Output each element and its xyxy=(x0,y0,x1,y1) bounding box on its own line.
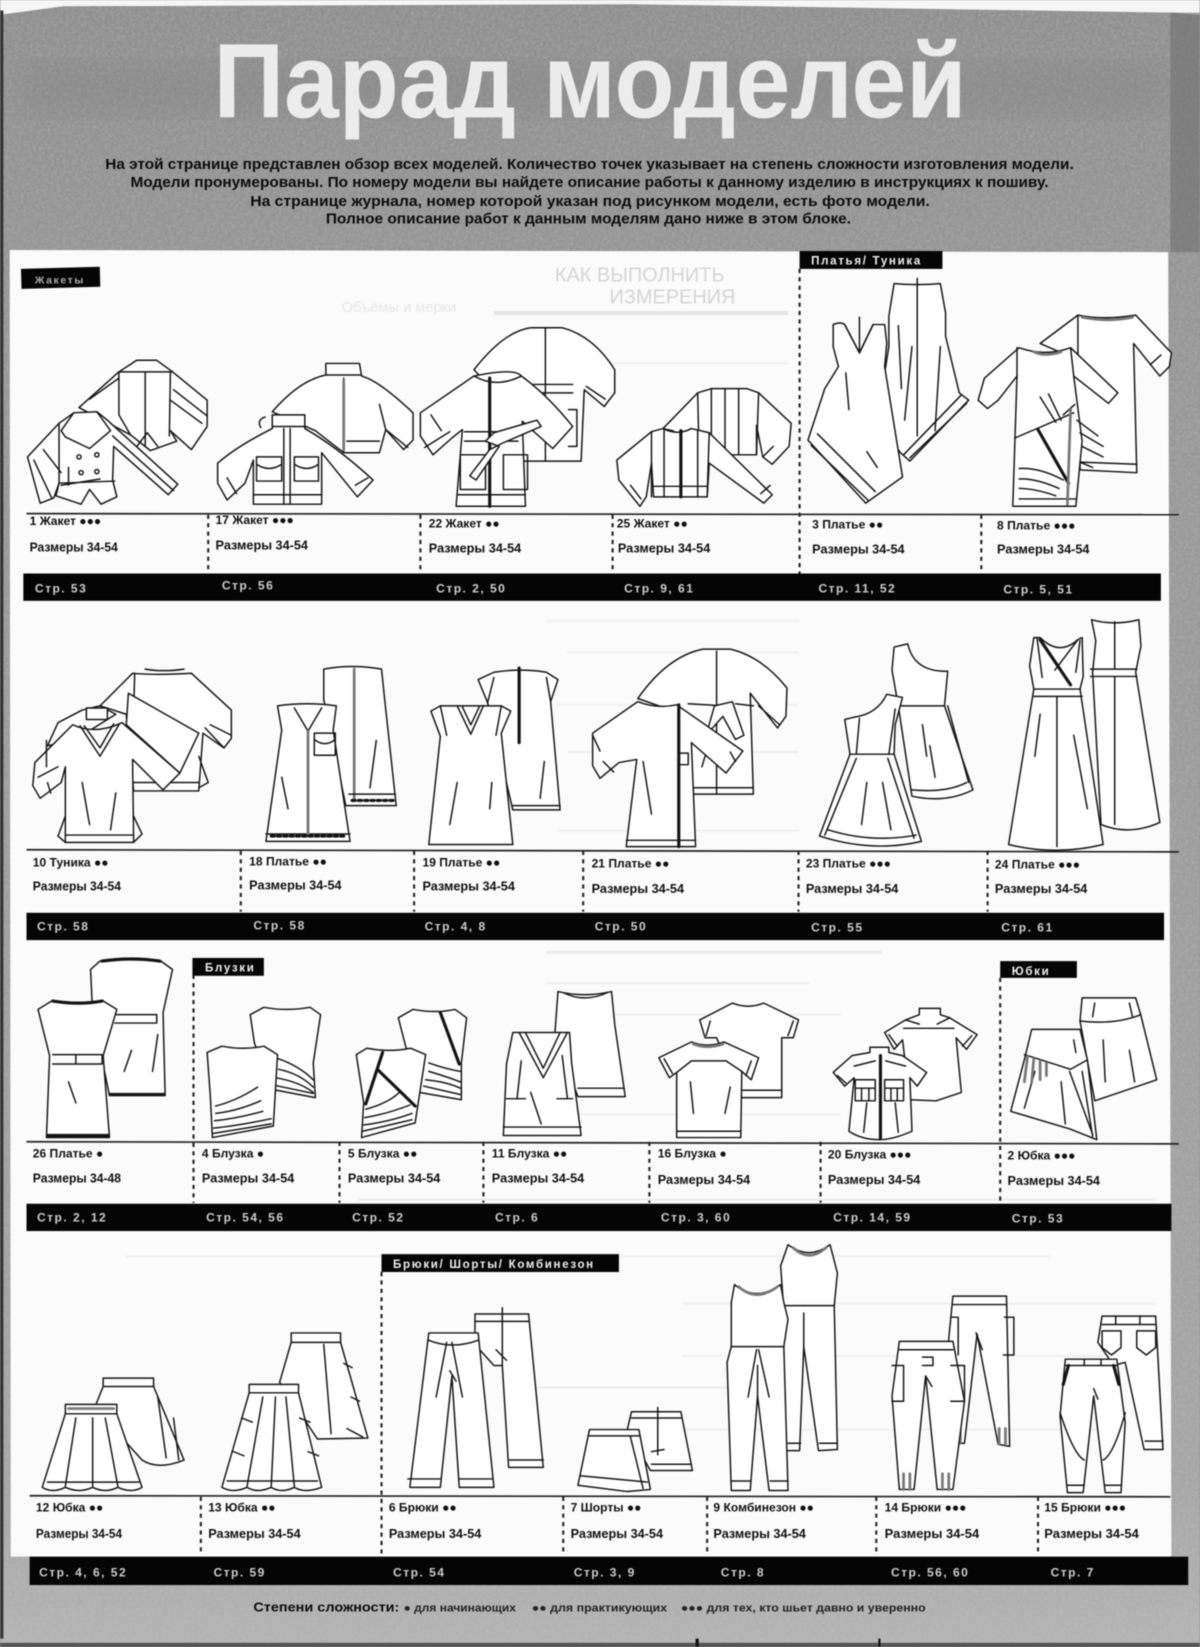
label: 24: 24 Платье ●●● xyxy=(995,858,1080,872)
drawing: blouse 16 xyxy=(659,1003,799,1138)
drawing: dress 24 xyxy=(1009,620,1160,850)
model 1 jacket: Стр. 53 xyxy=(35,581,87,595)
model 23 dress: Стр. 55 xyxy=(811,921,864,935)
model 24 dress xyxy=(995,620,1160,935)
label: 2: 2 Юбка ●●● xyxy=(1008,1149,1075,1163)
model 23 dress: Размеры 34-54 xyxy=(806,882,898,896)
intro text block: На этой странице представлен обзор всех моделей. Количество точек указывает на степень сложности изготовления модели. xyxy=(105,157,1074,173)
model 2 skirt: Размеры 34-54 xyxy=(1008,1174,1100,1188)
label: 4: 4 Блузка ● xyxy=(202,1147,264,1161)
label: 11: 11 Блузка ●● xyxy=(492,1147,567,1161)
row 3 rules and page bar xyxy=(26,975,1179,1231)
label: 15: 15 Брюки ●●● xyxy=(1044,1501,1126,1515)
legend: difficulty levels: ●●● для тех, кто шьет давно и уверенно xyxy=(681,1602,926,1614)
model 18 dress: Стр. 58 xyxy=(253,919,306,933)
model 9 jumpsuit: Размеры 34-54 xyxy=(713,1527,806,1541)
model 12 skirt: Стр. 4, 6, 52 xyxy=(39,1566,127,1580)
label: 8: 8 Платье ●●● xyxy=(997,518,1075,532)
label: 23: 23 Платье ●●● xyxy=(806,857,891,871)
model 20 blouse xyxy=(828,1008,977,1225)
model 13 skirt xyxy=(208,1333,368,1580)
category tag: Платья/Туника: Платья/ Туника xyxy=(811,256,922,268)
label: 26: 26 Платье ● xyxy=(33,1147,103,1161)
show-through text from reverse page: Объёмы и мерки xyxy=(342,300,456,316)
model 24 dress: Размеры 34-54 xyxy=(995,882,1087,896)
drawing: dress 18 xyxy=(266,666,396,841)
drawing: blouse 5 xyxy=(356,1009,467,1138)
model 7 shorts xyxy=(571,1408,692,1580)
model 9 jumpsuit: Стр. 8 xyxy=(721,1566,765,1580)
legend: difficulty levels xyxy=(253,1599,926,1614)
model 12 skirt: Размеры 34-54 xyxy=(36,1527,122,1541)
legend: difficulty levels: ● для начинающих xyxy=(404,1602,517,1614)
model 19 dress xyxy=(422,668,560,934)
drawing: trousers 14 xyxy=(892,1296,1014,1489)
model 6 trousers: Размеры 34-54 xyxy=(389,1527,481,1541)
model 4 blouse xyxy=(202,1007,321,1225)
drawing: dress 21 xyxy=(593,649,787,847)
model 25 jacket: Стр. 9, 61 xyxy=(624,581,694,595)
label: 25: 25 Жакет ●● xyxy=(617,516,688,530)
model 5 blouse: Стр. 52 xyxy=(352,1211,405,1225)
drawing: jacket 17 xyxy=(218,363,413,504)
model 19 dress: Стр. 4, 8 xyxy=(425,920,487,934)
category tag: Брюки/Шорты/Комбинезон: Брюки/ Шорты/ Комбинезон xyxy=(393,1259,595,1271)
drawing: blouse 20 xyxy=(833,1008,977,1140)
label: 6: 6 Брюки ●● xyxy=(389,1501,457,1515)
drawing: trousers 15 xyxy=(1060,1316,1163,1493)
model 3 dress: Размеры 34-54 xyxy=(812,543,905,557)
model 6 trousers: Стр. 54 xyxy=(393,1566,445,1580)
label: 12: 12 Юбка ●● xyxy=(36,1501,103,1515)
model 11 blouse: Размеры 34-54 xyxy=(492,1172,584,1186)
model 23 dress xyxy=(806,644,973,935)
model 16 blouse xyxy=(658,1003,799,1225)
model 21 dress: Стр. 50 xyxy=(595,920,647,934)
model 8 dress xyxy=(978,315,1171,596)
model 18 dress: Размеры 34-54 xyxy=(249,879,342,893)
model 14 trousers: Стр. 56, 60 xyxy=(891,1566,969,1580)
model 3 dress xyxy=(808,278,969,595)
white catalogue panel xyxy=(10,250,1171,1557)
model 3 dress: Стр. 11, 52 xyxy=(818,581,896,595)
drawing: skirt 2 xyxy=(1011,998,1157,1140)
drawing: jacket 25 xyxy=(617,389,791,506)
model 19 dress: Размеры 34-54 xyxy=(422,880,515,894)
category tag: Блузки: Блузки xyxy=(205,963,256,975)
model 14 trousers xyxy=(885,1296,1014,1580)
model 2 skirt xyxy=(1008,998,1157,1226)
model 22 jacket xyxy=(420,328,615,595)
model 15 trousers: Размеры 34-54 xyxy=(1044,1527,1139,1541)
show-through text from reverse page: ИЗМЕРЕНИЯ xyxy=(609,287,735,309)
model 10 tunic: Стр. 58 xyxy=(37,920,89,934)
drawing: dress 23 xyxy=(820,644,973,846)
model 11 blouse xyxy=(492,992,625,1225)
model 5 blouse: Размеры 34-54 xyxy=(348,1172,440,1186)
label: 17: 17 Жакет ●●● xyxy=(216,513,294,527)
label: 7: 7 Шорты ●● xyxy=(571,1501,641,1515)
label: 14: 14 Брюки ●●● xyxy=(885,1501,966,1515)
model 9 jumpsuit xyxy=(713,1245,837,1580)
model 25 jacket: Размеры 34-54 xyxy=(618,542,710,556)
model 26 dress xyxy=(33,958,172,1225)
drawing: shorts 7 xyxy=(578,1408,692,1492)
label: 10: 10 Туника ●● xyxy=(33,856,109,870)
model 21 dress: Размеры 34-54 xyxy=(592,882,684,896)
model 7 shorts: Стр. 3, 9 xyxy=(574,1566,636,1580)
row 2 rules and page bar xyxy=(26,850,1179,940)
model 20 blouse: Размеры 34-54 xyxy=(828,1173,920,1187)
model 21 dress xyxy=(592,649,787,934)
model 15 trousers xyxy=(1044,1316,1163,1580)
drawing: skirt 12 xyxy=(42,1378,184,1490)
model 7 shorts: Размеры 34-54 xyxy=(571,1527,663,1541)
drawing: skirt 13 xyxy=(222,1333,368,1490)
label: 22: 22 Жакет ●● xyxy=(429,516,500,530)
model 17 jacket: Размеры 34-54 xyxy=(216,538,308,552)
drawing: dress 26 xyxy=(38,958,172,1138)
category tag: Платья/Туника xyxy=(800,251,942,269)
row 4 rules and page bar xyxy=(30,1272,1188,1585)
category tag: Жакеты xyxy=(21,267,100,289)
model 17 jacket: Стр. 56 xyxy=(222,578,274,592)
model 14 trousers: Размеры 34-54 xyxy=(885,1527,979,1541)
model 26 dress: Стр. 2, 12 xyxy=(37,1211,107,1225)
drawing: blouse 11 xyxy=(503,992,625,1135)
label: 20: 20 Блузка ●●● xyxy=(828,1148,911,1162)
model 12 skirt xyxy=(36,1378,184,1580)
label: 21: 21 Платье ●● xyxy=(592,857,669,871)
label: 5: 5 Блузка ●● xyxy=(348,1147,417,1161)
model 22 jacket: Размеры 34-54 xyxy=(429,542,521,556)
row 1 rules and page bar xyxy=(23,269,1179,601)
label: 19: 19 Платье ●● xyxy=(422,856,500,870)
label: 9: 9 Комбинезон ●● xyxy=(713,1501,814,1515)
drawing: jacket 22 xyxy=(420,328,615,506)
model 8 dress: Размеры 34-54 xyxy=(997,543,1089,557)
show-through text from reverse page xyxy=(126,265,1156,1431)
model 11 blouse: Стр. 6 xyxy=(495,1211,539,1225)
drawing: dress 19 xyxy=(429,668,560,845)
model 17 jacket xyxy=(216,363,413,592)
model 18 dress xyxy=(249,666,396,933)
category tag: Блузки xyxy=(192,958,264,976)
label: 16: 16 Блузка ● xyxy=(658,1147,727,1161)
label: 1: 1 Жакет ●●● xyxy=(30,514,101,528)
model 4 blouse: Размеры 34-54 xyxy=(202,1172,294,1186)
model 22 jacket: Стр. 2, 50 xyxy=(436,581,506,595)
model 26 dress: Размеры 34-48 xyxy=(33,1172,121,1186)
model 24 dress: Стр. 61 xyxy=(1001,921,1054,935)
drawing: dress 8 xyxy=(978,315,1171,506)
model 5 blouse xyxy=(348,1009,467,1225)
intro text block: Модели пронумерованы. По номеру модели вы найдете описание работы к данному изделию в инструкциях к пошиву. xyxy=(130,175,1049,191)
intro text block xyxy=(105,157,1074,228)
model 25 jacket xyxy=(617,389,791,595)
model 1 jacket: Размеры 34-54 xyxy=(30,540,118,554)
model 8 dress: Стр. 5, 51 xyxy=(1003,582,1074,596)
model 6 trousers xyxy=(389,1308,543,1580)
category tag: Брюки/Шорты/Комбинезон xyxy=(382,1254,619,1272)
category tag: Юбки xyxy=(1000,961,1077,978)
model 16 blouse: Стр. 3, 60 xyxy=(661,1211,731,1225)
legend: difficulty levels: ●● для практикующих xyxy=(532,1602,668,1614)
model 15 trousers: Стр. 7 xyxy=(1051,1566,1095,1580)
intro text block: На странице журнала, номер которой указан под рисунком модели, есть фото модели. xyxy=(250,194,930,210)
model 10 tunic xyxy=(33,669,231,934)
drawing: jumpsuit 9 xyxy=(727,1245,837,1490)
model 2 skirt: Стр. 53 xyxy=(1012,1212,1064,1226)
model 10 tunic: Размеры 34-54 xyxy=(33,880,121,894)
model 1 jacket xyxy=(28,360,207,595)
model 13 skirt: Стр. 59 xyxy=(213,1566,266,1580)
title: Парад моделей xyxy=(213,23,967,141)
drawing: dress 3 xyxy=(808,278,969,503)
drawing: tunic 10 xyxy=(33,669,231,842)
show-through text from reverse page: КАК ВЫПОЛНИТЬ xyxy=(555,265,725,287)
label: 18: 18 Платье ●● xyxy=(249,855,327,869)
model 4 blouse: Стр. 54, 56 xyxy=(206,1211,285,1225)
drawing: trousers 6 xyxy=(408,1308,543,1487)
category tag: Жакеты: Жакеты xyxy=(34,275,85,287)
label: 3: 3 Платье ●● xyxy=(812,517,883,531)
model 20 blouse: Стр. 14, 59 xyxy=(833,1211,912,1225)
legend: difficulty levels: Степени сложности: xyxy=(253,1599,399,1614)
model 16 blouse: Размеры 34-54 xyxy=(658,1173,750,1187)
drawing: blouse 4 xyxy=(207,1007,321,1138)
model 13 skirt: Размеры 34-54 xyxy=(208,1527,301,1541)
drawing: jacket 1 xyxy=(28,360,207,504)
category tag: Юбки: Юбки xyxy=(1012,966,1050,978)
label: 13: 13 Юбка ●● xyxy=(208,1501,276,1515)
intro text block: Полное описание работ к данным моделям дано ниже в этом блоке. xyxy=(326,212,851,228)
